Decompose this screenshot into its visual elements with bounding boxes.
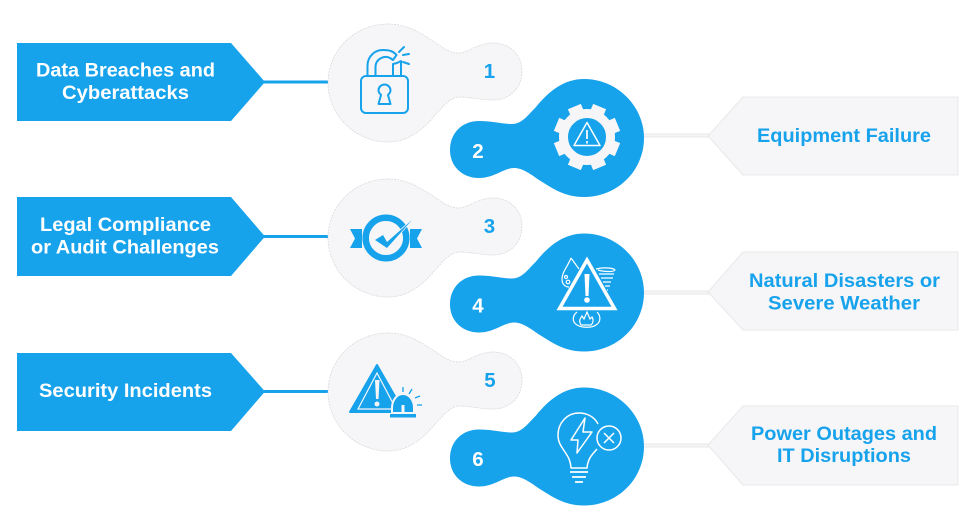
icon: check badge <box>350 218 422 258</box>
label: Equipment Failure <box>708 97 958 175</box>
icon: warning with water, tornado and fire <box>560 258 615 327</box>
label: Legal Compliance or Audit Challenges <box>17 197 265 276</box>
blob 6 with light bulb icon <box>450 388 644 506</box>
label: Legal Compliance or Audit Challenges: Legal Compliance <box>40 214 211 236</box>
blob 5 with siren icon <box>328 333 522 451</box>
connector: row 1 right <box>640 134 710 137</box>
label: Power Outages and IT Disruptions: IT Disruptions <box>777 445 911 467</box>
icon: warning triangle with siren <box>350 365 422 418</box>
icon: broken padlock <box>361 47 409 113</box>
blob 4 with disaster icon <box>450 234 644 352</box>
label: Security Incidents: Security Incidents <box>39 380 212 402</box>
connector: row 1 left <box>262 80 330 84</box>
blob 5 with siren icon: 5 <box>484 369 496 392</box>
label: Legal Compliance or Audit Challenges: or Audit Challenges <box>31 236 219 258</box>
blob 1 with lock icon <box>328 24 522 142</box>
connector: row 3 right <box>640 444 710 447</box>
connector: row 3 left <box>262 390 330 393</box>
blob 2 with gear icon: 2 <box>472 140 484 163</box>
label: Natural Disasters or Severe Weather <box>708 252 958 330</box>
blob 4 with disaster icon: 4 <box>472 294 484 318</box>
label: Equipment Failure: Equipment Failure <box>757 125 931 147</box>
label: Natural Disasters or Severe Weather: Natural Disasters or <box>749 270 940 292</box>
blob 6 with light bulb icon: 6 <box>472 448 484 471</box>
label: Data Breaches and Cyberattacks: Cyberattacks <box>62 82 189 104</box>
label: Data Breaches and Cyberattacks <box>17 43 265 121</box>
connector: row 2 right <box>640 291 710 294</box>
icon: gear with warning <box>554 104 620 170</box>
label: Power Outages and IT Disruptions <box>708 406 958 485</box>
label: Security Incidents <box>17 353 265 431</box>
blob 3 with badge icon: 3 <box>484 215 495 238</box>
blob 1 with lock icon: 1 <box>484 60 495 83</box>
icon: light bulb with cross <box>558 413 621 482</box>
blob 3 with badge icon <box>328 179 522 297</box>
label: Natural Disasters or Severe Weather: Severe Weather <box>768 292 920 314</box>
connector: row 2 left <box>262 235 330 238</box>
label: Power Outages and IT Disruptions: Power Outages and <box>751 423 937 445</box>
blob 2 with gear icon <box>450 79 644 197</box>
label: Data Breaches and Cyberattacks: Data Breaches and <box>36 60 215 82</box>
